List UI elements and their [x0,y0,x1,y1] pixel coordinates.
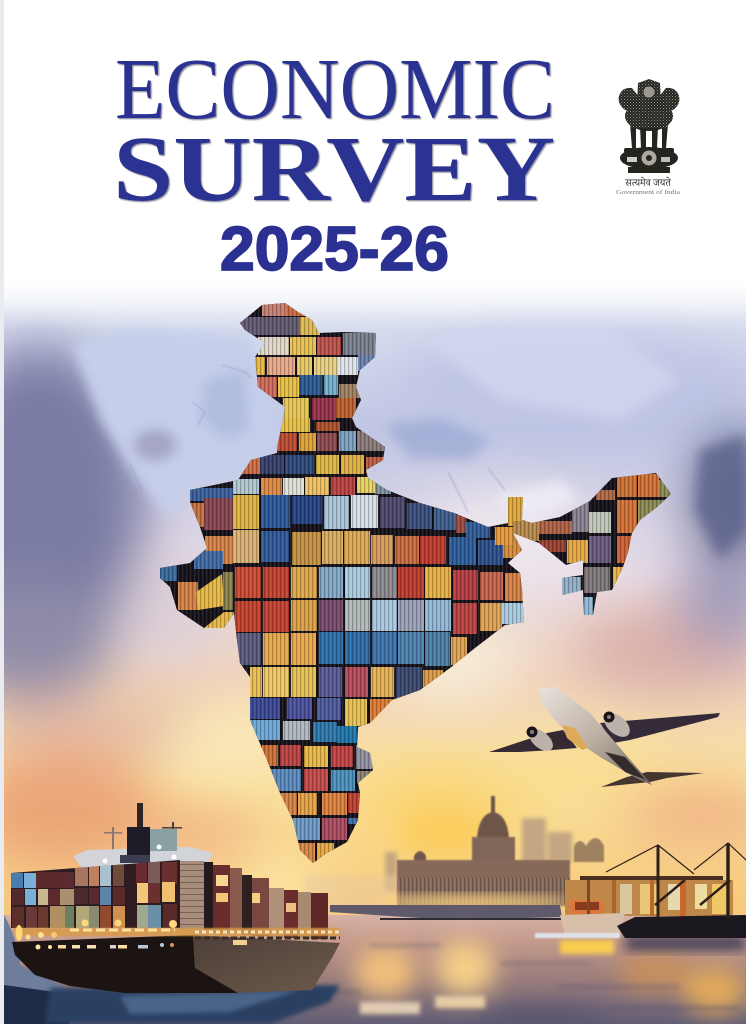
india map of containers [150,295,680,870]
dark vessel hull [617,915,746,938]
sea cracks [130,365,505,512]
containers: central rows [160,495,525,698]
heading: economic: ECONOMIC [115,40,555,137]
ship side stacks [180,861,328,939]
containers: northeast [495,474,673,615]
sky background [4,295,746,915]
title [113,40,555,221]
palace building [397,860,570,906]
ship superstructure [73,803,213,868]
embankment [330,905,562,918]
side domes [414,851,426,868]
continent shapes [72,322,746,560]
heading: survey: SURVEY [113,118,555,221]
left shore and bow wave [4,915,70,1024]
pale vessel [560,913,625,938]
container corrugation [150,295,680,870]
plane tail [601,772,704,787]
water reflections [353,940,747,1024]
deck lights [14,920,340,950]
bright reflection [560,940,614,954]
icon: national emblem [617,78,681,173]
left edge strip [0,0,4,1024]
emblem motto: सत्यमेव जयते [624,177,671,189]
water streaks [330,944,740,1010]
shaded water under port [625,936,746,950]
cranes [606,843,746,918]
plane left wing [489,730,577,752]
emblem caption: Government of India [616,189,680,196]
containers: south [250,698,395,865]
heading: year: 2025-26 [220,215,449,284]
plane right wing [600,713,720,743]
right margin [746,0,751,1024]
ship container stack [11,858,181,930]
airplane [489,687,720,787]
city skyline [305,796,604,908]
vessel foam [535,933,620,938]
terminal building [565,876,733,918]
port with cranes and vessel [535,843,746,938]
main dome [491,796,495,814]
containers: north [190,303,391,501]
ripple highlights [360,996,485,1014]
plane fuselage [539,687,652,785]
water [0,905,751,1024]
cargo ship [11,803,340,993]
plane engines [600,708,634,742]
ship hull [12,935,340,993]
